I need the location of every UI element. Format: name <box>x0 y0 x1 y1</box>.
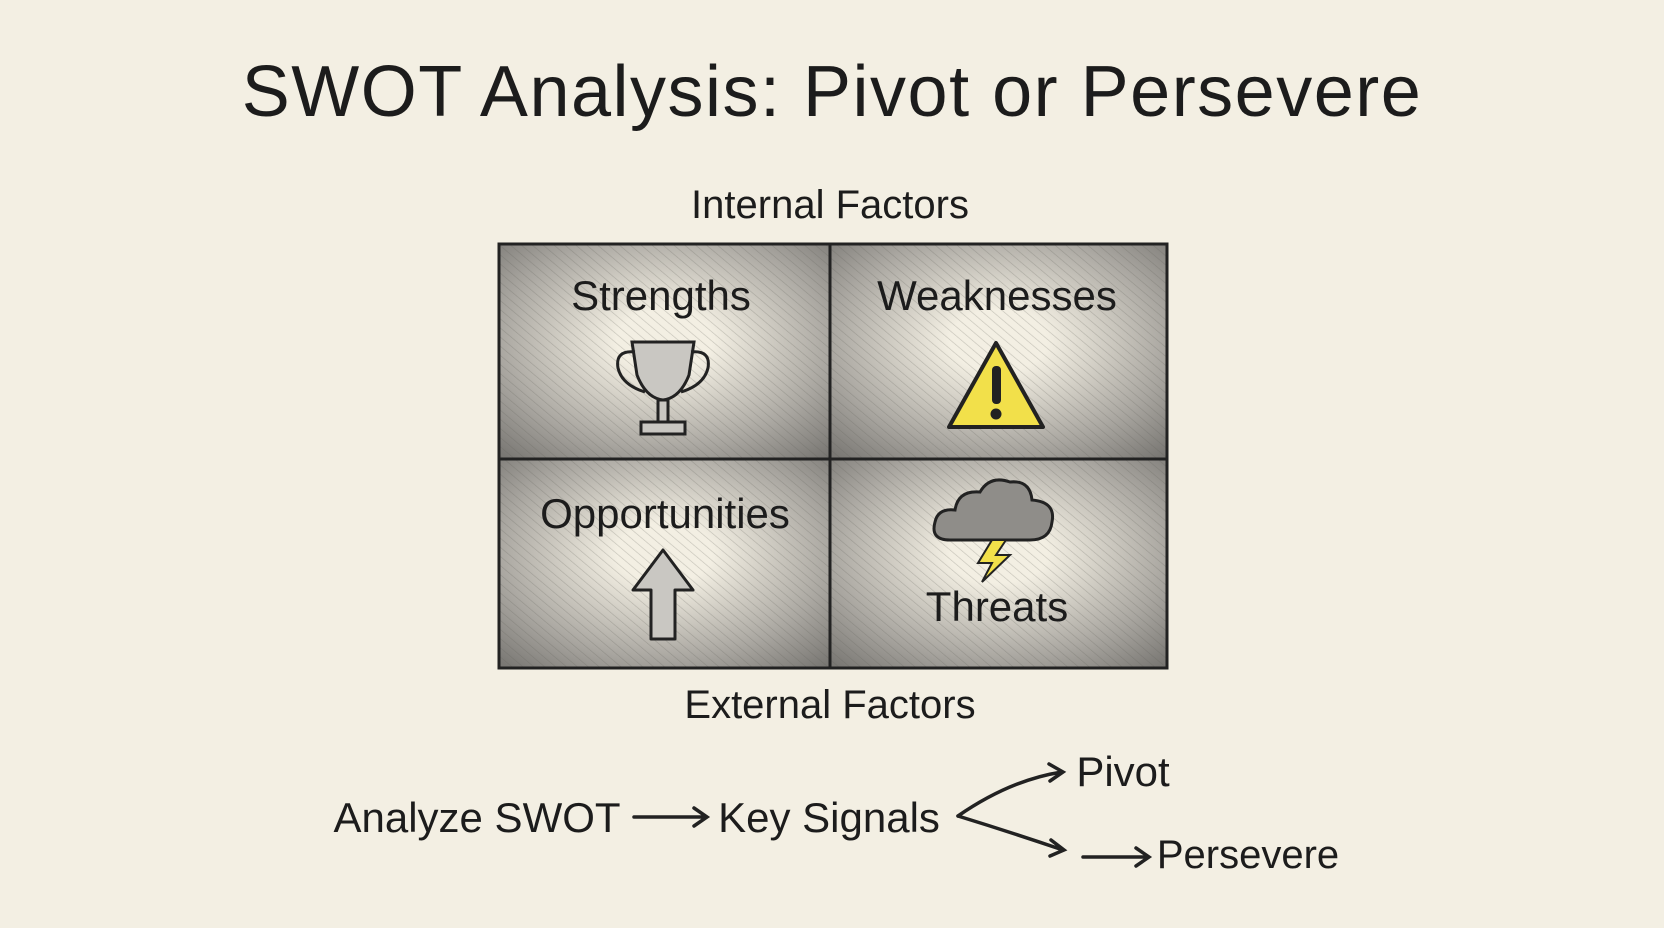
quadrant: threats: Threats <box>926 583 1068 630</box>
flow: persevere: Persevere <box>1157 833 1339 877</box>
flow: pivot: Pivot <box>1076 748 1170 795</box>
quadrant: opportunities: Opportunities <box>540 490 790 537</box>
icon: warning <box>949 343 1043 427</box>
quadrant: weaknesses: Weaknesses <box>877 272 1117 319</box>
quadrant: strengths: Strengths <box>571 272 751 319</box>
flow: analyze swot: Analyze SWOT <box>333 794 621 841</box>
icon: up arrow <box>633 550 693 639</box>
icon: storm cloud <box>934 480 1053 582</box>
arrows: flow <box>634 764 1149 866</box>
label: external factors: External Factors <box>684 683 976 727</box>
title: SWOT Analysis: Pivot or Persevere <box>242 52 1422 132</box>
label: internal factors: Internal Factors <box>691 183 969 227</box>
icon: trophy <box>618 342 708 434</box>
flow: key signals: Key Signals <box>718 794 940 841</box>
